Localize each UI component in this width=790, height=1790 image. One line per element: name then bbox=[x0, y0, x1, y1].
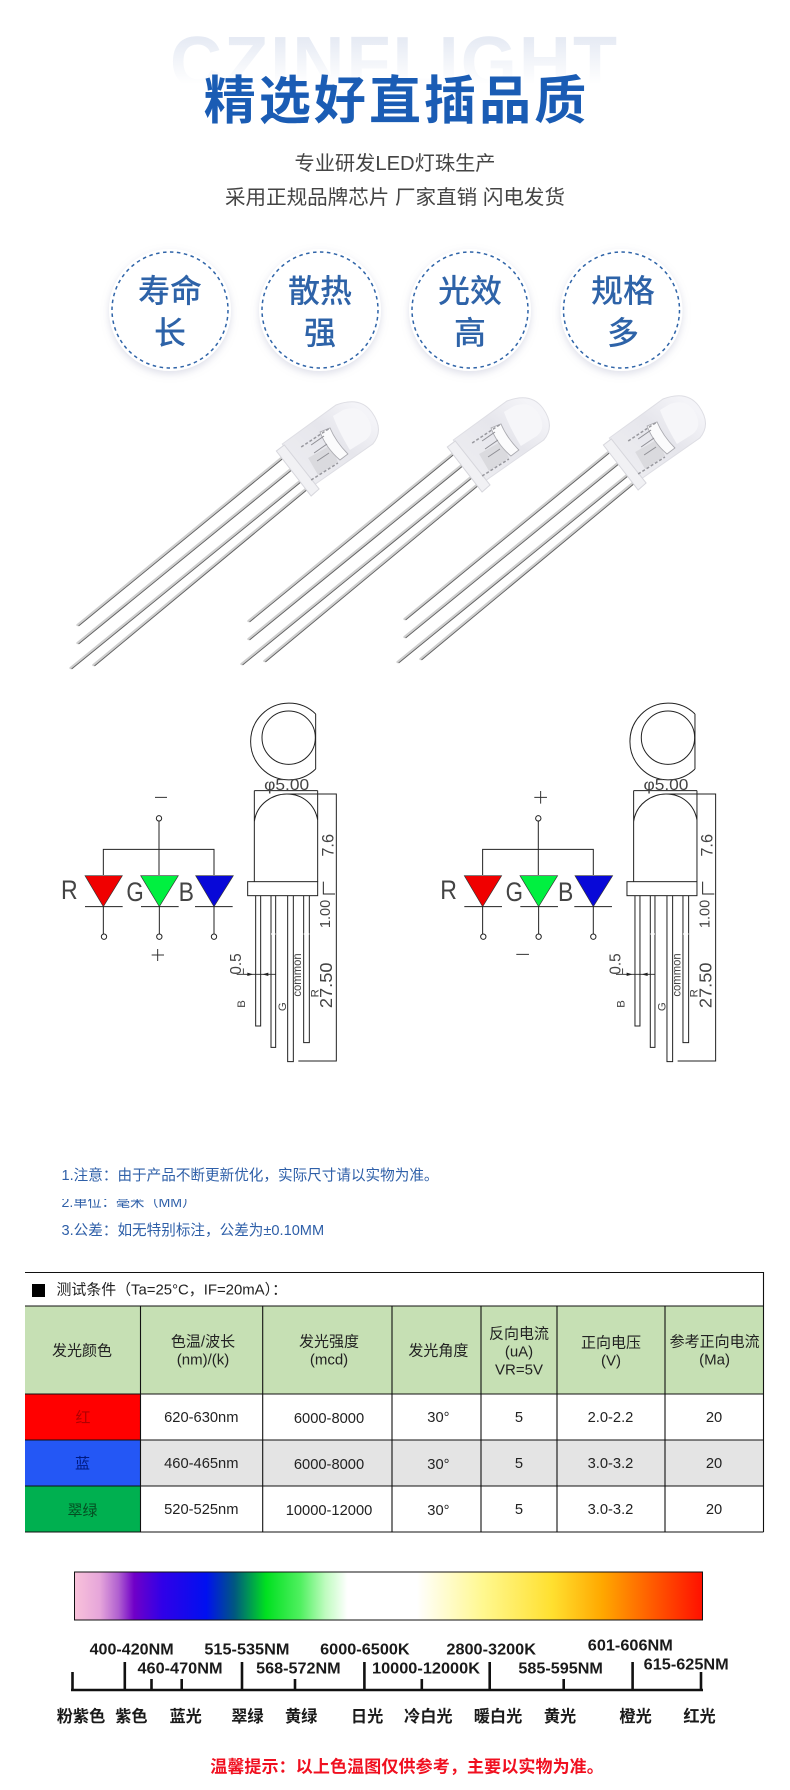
badge: 寿命长: 长 bbox=[154, 315, 186, 351]
table grid bbox=[25, 1272, 764, 1532]
badge: 寿命长 bbox=[109, 249, 231, 371]
row: 红: 30° bbox=[427, 1410, 450, 1426]
LED dimension drawing right: G bbox=[656, 1002, 668, 1011]
badge: 光效高 bbox=[409, 249, 531, 371]
table header row: (nm)/(k) bbox=[177, 1352, 229, 1368]
row: 翠绿 bbox=[67, 1502, 722, 1520]
wavelength labels: 400-420NM bbox=[90, 1642, 174, 1658]
schematic right: G bbox=[506, 877, 523, 907]
table header row: 色温/波长 bbox=[171, 1334, 235, 1350]
LED dimension drawing left: 1.00 bbox=[318, 900, 334, 928]
badge: 光效高: 光效 bbox=[438, 273, 502, 309]
LED dimension drawing right: R bbox=[689, 989, 701, 997]
wavelength labels: 10000-12000K bbox=[372, 1660, 480, 1678]
row: 蓝: 6000-8000 bbox=[294, 1457, 364, 1473]
watermark: CZINFLIGHT: CZINFLIGHT bbox=[170, 23, 617, 103]
LED dimension drawing left: B bbox=[236, 1000, 248, 1008]
LED dimension drawing right: 1.00 bbox=[697, 900, 713, 928]
table header row: 参考正向电流 bbox=[670, 1334, 760, 1350]
LED dimension drawing left bbox=[228, 703, 337, 1062]
table fills bbox=[25, 1306, 764, 1532]
row: 红: 红 bbox=[75, 1410, 91, 1426]
diagram: common cathode (left) bbox=[61, 703, 337, 1062]
schematic left: G bbox=[126, 877, 144, 907]
note 1: 1.注意：由于产品不断更新优化，实际尺寸请以实物为准。 bbox=[62, 1166, 439, 1184]
schematic left bbox=[61, 797, 233, 961]
badge: 规格多: 多 bbox=[607, 315, 639, 351]
LED dimension drawing right: φ5.00 bbox=[643, 777, 688, 794]
schematic right: B bbox=[558, 877, 573, 907]
row: 翠绿: 5 bbox=[515, 1502, 523, 1518]
color name labels: 粉紫色 bbox=[57, 1707, 105, 1726]
badge: 寿命长: 寿命 bbox=[138, 273, 202, 309]
LED dimension drawing left: G bbox=[277, 1002, 289, 1011]
wavelength labels: 2800-3200K bbox=[446, 1642, 536, 1658]
table header row: (Ma) bbox=[699, 1352, 730, 1368]
LED dimension drawing left: 7.6 bbox=[319, 834, 337, 857]
row: 蓝 bbox=[75, 1456, 722, 1473]
row: 红: 5 bbox=[515, 1410, 523, 1426]
LED 1 bbox=[71, 402, 378, 669]
schematic right: R bbox=[440, 875, 457, 905]
table header row: VR=5V bbox=[495, 1362, 543, 1378]
LED dimension drawing right: common bbox=[669, 953, 683, 997]
subtitle line 1: 专业研发LED灯珠生产 bbox=[294, 152, 496, 175]
spec table bbox=[25, 1272, 764, 1532]
table header row: 正向电压 bbox=[581, 1334, 641, 1352]
subtitle bbox=[225, 152, 565, 209]
color name labels: 翠绿 bbox=[231, 1707, 264, 1726]
wavelength labels: 601-606NM bbox=[588, 1638, 673, 1654]
schematic left: B bbox=[179, 877, 194, 907]
spectrum axis bbox=[71, 1662, 703, 1690]
color name labels: 黄光 bbox=[544, 1708, 576, 1726]
color name labels: 紫色 bbox=[115, 1707, 148, 1726]
row: 翠绿: 20 bbox=[706, 1502, 722, 1518]
LED 2 bbox=[242, 398, 549, 665]
table header row bbox=[52, 1326, 760, 1378]
LED dimension drawing left: 27.50 bbox=[316, 962, 336, 1008]
wavelength labels: 515-535NM bbox=[204, 1642, 289, 1658]
table header row: 发光角度 bbox=[408, 1342, 468, 1360]
schematic right bbox=[440, 791, 613, 954]
LED dimension drawing left: 0.5 bbox=[228, 953, 245, 975]
LED dimension drawing right: B bbox=[615, 1000, 627, 1008]
row: 翠绿: 520-525nm bbox=[164, 1502, 238, 1518]
badge: 散热强: 散热 bbox=[288, 273, 352, 309]
row: 红: 20 bbox=[706, 1410, 722, 1426]
badge: 光效高: 高 bbox=[454, 315, 486, 351]
color name labels: 橙光 bbox=[619, 1707, 652, 1726]
LED dimension drawing right bbox=[607, 703, 717, 1062]
LED dimension drawing left: R bbox=[309, 989, 321, 997]
color name labels: 暖白光 bbox=[474, 1708, 522, 1726]
badge: 散热强 bbox=[259, 249, 381, 371]
note 2 (top edge clipped): 2.单位：毫米（MM） bbox=[62, 1194, 196, 1211]
row: 蓝: 5 bbox=[515, 1456, 523, 1472]
wavelength labels: 460-470NM bbox=[138, 1660, 222, 1678]
wavelength labels bbox=[90, 1638, 729, 1678]
row: 翠绿: 30° bbox=[427, 1503, 450, 1519]
row: 蓝: 460-465nm bbox=[164, 1456, 238, 1472]
subtitle line 2: 采用正规品牌芯片 厂家直销 闪电发货 bbox=[225, 186, 565, 209]
row: 红 bbox=[75, 1410, 722, 1427]
row: 红: 620-630nm bbox=[164, 1410, 238, 1426]
LED dimension drawing right: 27.50 bbox=[695, 962, 715, 1008]
row: 蓝: 3.0-3.2 bbox=[588, 1456, 633, 1472]
wavelength labels: 615-625NM bbox=[644, 1656, 729, 1674]
row: 翠绿: 翠绿 bbox=[67, 1502, 98, 1520]
LED product photos bbox=[71, 396, 706, 669]
title: 精选好直插品质 bbox=[204, 73, 586, 131]
color name labels: 冷白光 bbox=[404, 1707, 453, 1726]
warm reminder: 温馨提示：以上色温图仅供参考，主要以实物为准。 bbox=[210, 1756, 604, 1776]
LED 3 bbox=[398, 396, 706, 663]
LED dimension drawing right: 7.6 bbox=[699, 834, 717, 857]
row: 翠绿: 10000-12000 bbox=[286, 1503, 372, 1519]
wavelength labels: 585-595NM bbox=[518, 1660, 603, 1678]
table header row: (uA) bbox=[505, 1344, 533, 1360]
row: 蓝: 20 bbox=[706, 1456, 722, 1472]
table header row: (V) bbox=[601, 1352, 621, 1370]
row: 红: 6000-8000 bbox=[294, 1411, 364, 1427]
row: 蓝: 蓝 bbox=[75, 1456, 90, 1472]
color name labels: 蓝光 bbox=[170, 1708, 202, 1726]
LED dimension drawing right: 0.5 bbox=[607, 953, 624, 975]
row: 蓝: 30° bbox=[427, 1457, 450, 1473]
LED dimension drawing left: common bbox=[290, 953, 304, 997]
row: 翠绿: 3.0-3.2 bbox=[588, 1502, 633, 1518]
row: 红: 2.0-2.2 bbox=[588, 1410, 633, 1426]
diagram: common anode (right) bbox=[440, 703, 717, 1062]
table header row: 发光强度 bbox=[299, 1334, 359, 1350]
table header row: (mcd) bbox=[310, 1352, 348, 1368]
notes bbox=[62, 1166, 439, 1239]
note 3: 3.公差：如无特别标注，公差为±0.10MM bbox=[62, 1222, 324, 1239]
wavelength labels: 568-572NM bbox=[256, 1660, 341, 1678]
badge: 规格多 bbox=[560, 249, 682, 371]
table header row: 发光颜色 bbox=[52, 1342, 112, 1360]
schematic left: R bbox=[61, 875, 78, 905]
badge: 规格多: 规格 bbox=[591, 273, 655, 309]
color name labels bbox=[57, 1707, 716, 1726]
color spectrum bar bbox=[74, 1572, 702, 1620]
color name labels: 日光 bbox=[351, 1708, 383, 1726]
color name labels: 黄绿 bbox=[285, 1707, 317, 1726]
color name labels: 红光 bbox=[683, 1707, 716, 1726]
badge: 散热强: 强 bbox=[304, 315, 336, 351]
table header row: 反向电流 bbox=[489, 1326, 549, 1342]
wavelength labels: 6000-6500K bbox=[320, 1642, 410, 1658]
table caption: 测试条件（Ta=25°C，IF=20mA）： bbox=[56, 1282, 287, 1298]
LED dimension drawing left: φ5.00 bbox=[264, 777, 309, 794]
